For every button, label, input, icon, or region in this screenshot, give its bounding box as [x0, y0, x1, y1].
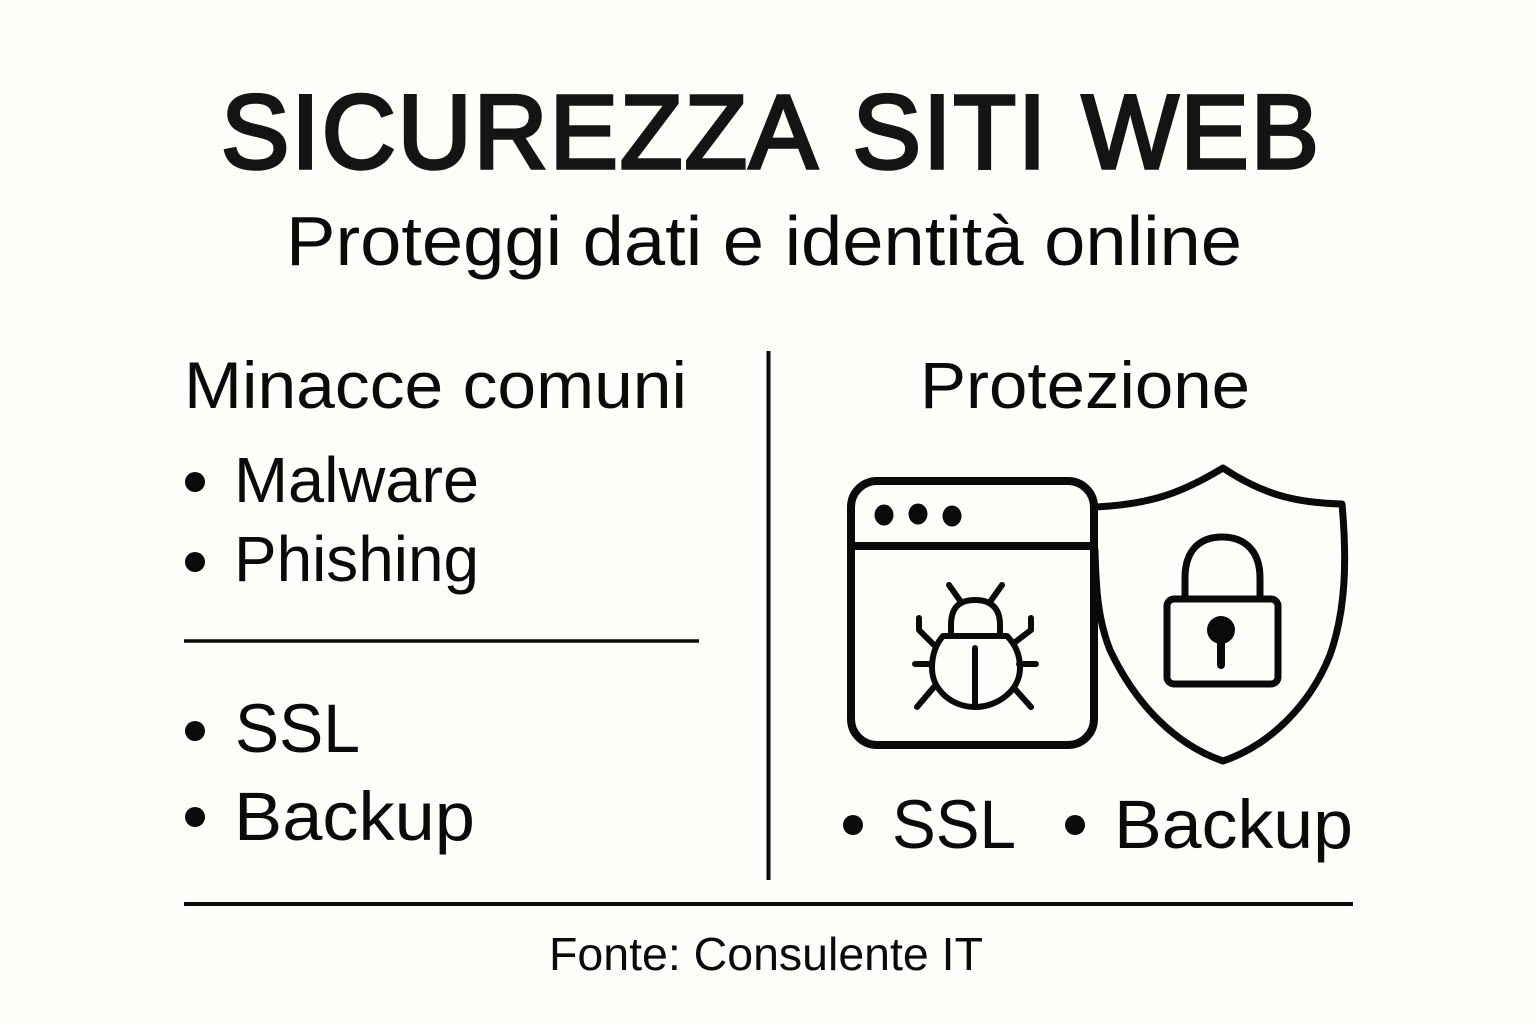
- source note: Fonte: Consulente IT: [549, 928, 983, 980]
- icon: shield with padlock: [1095, 468, 1345, 761]
- list item: ssl: SSL: [892, 786, 1016, 863]
- list item: backup: Backup: [234, 778, 475, 855]
- panel: protection: [843, 348, 1353, 863]
- title: SICUREZZA SITI WEB: [221, 74, 1321, 191]
- list item: malware: Malware: [234, 444, 479, 516]
- heading: threats: Minacce comuni: [184, 348, 687, 422]
- list item: ssl: [185, 690, 360, 767]
- panel: threats: [184, 348, 699, 855]
- heading: protection: Protezione: [920, 348, 1250, 422]
- list item: ssl: SSL: [235, 690, 360, 767]
- list item: ssl: [843, 786, 1016, 863]
- icon: browser window with bug: [851, 481, 1094, 745]
- subtitle: Proteggi dati e identità online: [286, 202, 1242, 280]
- list item: backup: Backup: [1114, 786, 1353, 863]
- list item: phishing: Phishing: [234, 523, 479, 595]
